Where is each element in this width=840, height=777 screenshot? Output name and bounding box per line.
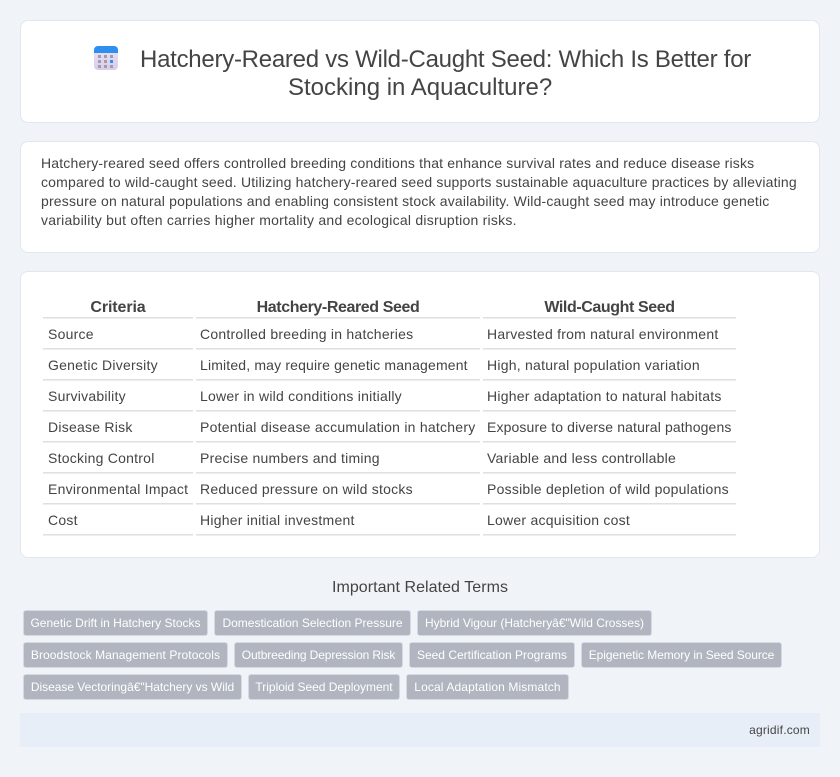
panel: title header: [20, 20, 820, 123]
title: Hatchery-Reared vs Wild-Caught Seed: Which Is Better for: [140, 46, 751, 73]
tag group: related terms: Domestication Selection Pressure: [222, 616, 403, 630]
table: comparison: [43, 299, 736, 536]
table: comparison: Wild-Caught Seed: [544, 299, 675, 316]
tag group: related terms: Outbreeding Depression Risk: [242, 648, 395, 662]
tag group: related terms: Broodstock Management Protocols: [31, 648, 220, 662]
tag group: related terms: Disease Vectoringâ€"Hatchery vs Wild: [31, 680, 234, 694]
heading: related terms: Important Related Terms: [332, 579, 508, 596]
table: comparison: Higher initial investment: [200, 512, 355, 528]
panel: comparison table: [20, 271, 820, 558]
text block: introduction: compared to wild-caught seed. Utilizing hatchery-reared seed supports sustainable aquaculture practices by alleviating: [41, 174, 797, 190]
footer: [20, 713, 820, 747]
table: comparison: Survivability: [48, 388, 126, 404]
table: comparison: Possible depletion of wild populations: [487, 481, 729, 497]
table: comparison: Criteria: [90, 299, 146, 316]
tag group: related terms: Triploid Seed Deployment: [255, 680, 393, 694]
tag group: related terms: [23, 610, 782, 700]
tag group: related terms: Local Adaptation Mismatch: [414, 680, 561, 694]
table: comparison: Potential disease accumulation in hatchery: [200, 419, 475, 435]
table: comparison: Precise numbers and timing: [200, 450, 380, 466]
panel: introduction: [20, 141, 820, 253]
table: comparison: Environmental Impact: [48, 481, 188, 497]
table: comparison: Controlled breeding in hatcheries: [200, 326, 413, 342]
table: comparison: Stocking Control: [48, 450, 155, 466]
footer source label: agridif.com: [749, 723, 810, 737]
table: comparison: High, natural population variation: [487, 357, 700, 373]
table: comparison: Disease Risk: [48, 419, 133, 435]
table: comparison: Reduced pressure on wild stocks: [200, 481, 413, 497]
tag group: related terms: Epigenetic Memory in Seed Source: [589, 648, 774, 662]
text block: introduction: Hatchery-reared seed offers controlled breeding conditions that enhance survival rates and reduce disease risks: [41, 155, 754, 171]
text block: introduction: [41, 155, 797, 228]
table: comparison: Harvested from natural environment: [487, 326, 718, 342]
table: comparison: Lower in wild conditions initially: [200, 388, 402, 404]
table: comparison: Exposure to diverse natural pathogens: [487, 419, 732, 435]
table: comparison: Genetic Diversity: [48, 357, 158, 373]
tag group: related terms: Genetic Drift in Hatchery Stocks: [30, 616, 201, 630]
text block: introduction: pressure on natural populations and enabling consistent stock availability. Wild-caught seed may introduce genetic: [41, 193, 769, 209]
table: comparison: Variable and less controllable: [487, 450, 676, 466]
text block: introduction: variability but often carries higher mortality and ecological disruption risks.: [41, 212, 517, 228]
tag group: related terms: Hybrid Vigour (Hatcheryâ€"Wild Crosses): [425, 616, 644, 630]
title second line: Stocking in Aquaculture?: [288, 74, 552, 101]
table: comparison: Limited, may require genetic management: [200, 357, 468, 373]
table: comparison: Hatchery-Reared Seed: [257, 299, 419, 316]
icon: calendar: [94, 46, 118, 70]
table: comparison: Cost: [48, 512, 78, 528]
table: comparison: Higher adaptation to natural habitats: [487, 388, 722, 404]
table: comparison: Source: [48, 326, 94, 342]
tag group: related terms: Seed Certification Programs: [417, 648, 567, 662]
table: comparison: Lower acquisition cost: [487, 512, 630, 528]
